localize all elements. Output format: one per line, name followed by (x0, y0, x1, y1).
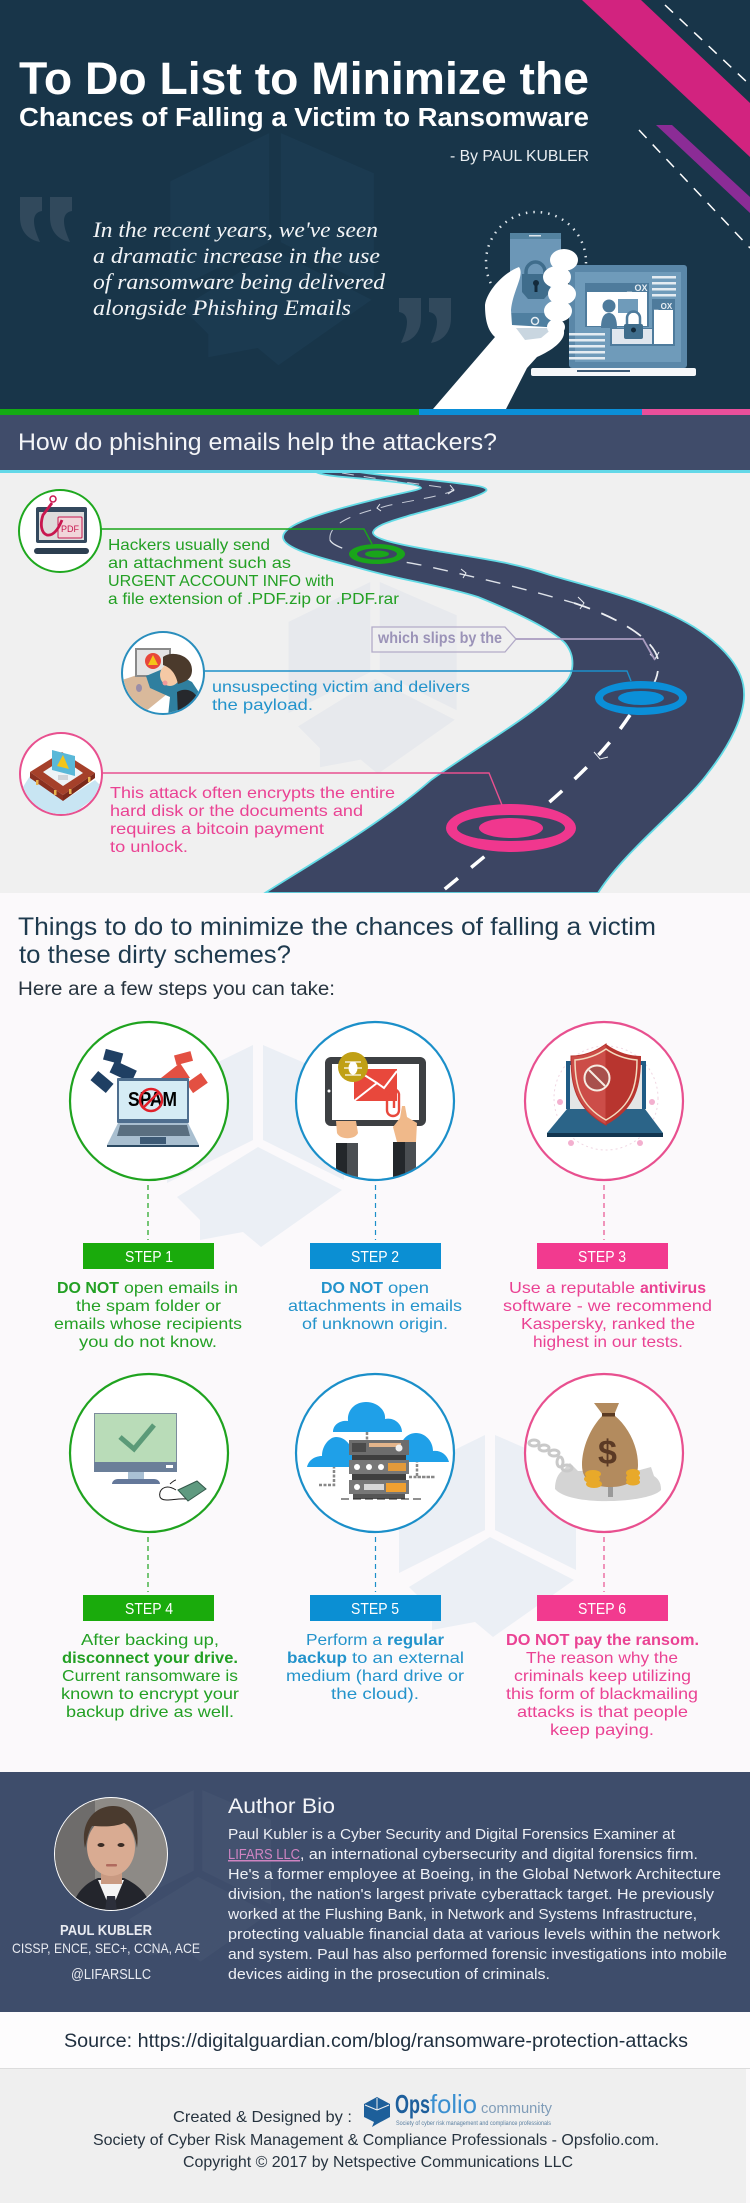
text: hackers usually send: Hackers usually send (108, 537, 270, 554)
step 3 (503, 1022, 712, 1351)
bio text: devices aiding in the prosecution of criminals. (228, 1966, 550, 1983)
author name and credentials: PAUL KUBLER (60, 1922, 152, 1939)
watermark: author hexagon (121, 1790, 271, 1962)
connector (603, 1537, 605, 1592)
bio text: He's a former employee at Boeing, in the Global Network Architecture (228, 1866, 721, 1883)
bio text: protecting valuable financial data at various levels within the network (228, 1926, 721, 1943)
icon: spam laptop (70, 1022, 228, 1180)
step text: Kaspersky, ranked the (521, 1316, 695, 1333)
step text: open (388, 1280, 429, 1297)
author name and credentials (12, 1922, 200, 1983)
byline: - By PAUL KUBLER (450, 148, 589, 165)
step text: highest in our tests. (533, 1334, 683, 1351)
step label (537, 1243, 668, 1269)
credits (93, 2132, 659, 2171)
icon: tablet attachment (296, 1022, 454, 1180)
icon: ransom money bag (525, 1374, 683, 1532)
panel: header (0, 0, 750, 409)
step label: STEP 2 (351, 1249, 399, 1266)
step label: STEP 3 (578, 1249, 626, 1266)
step text: criminals keep utilizing (514, 1668, 691, 1685)
step text: Perform a (306, 1632, 382, 1649)
text: hackers usually send (108, 537, 400, 608)
heading: things to do (18, 913, 656, 969)
connector (147, 1185, 149, 1240)
step text: you do not know. (79, 1334, 217, 1351)
text: unsuspecting victim: the payload. (212, 697, 313, 714)
connector (374, 1185, 376, 1240)
icon: opening quote (20, 197, 72, 242)
step 5 (286, 1374, 465, 1703)
step text: Current ransomware is (62, 1668, 238, 1685)
step 1 (54, 1022, 242, 1351)
step text: open emails in (124, 1280, 238, 1297)
text: this attack encrypts (110, 785, 395, 856)
color bar (0, 409, 750, 415)
watermark: header hexagon (170, 133, 374, 365)
tag: which slips by the (372, 627, 655, 660)
title: To Do List to Minimize the (19, 53, 589, 104)
author name and credentials: @LIFARSLLC (71, 1967, 151, 1983)
credits: Copyright © 2017 by Netspective Communications LLC (183, 2154, 573, 2171)
heading band: how do phishing emails help (0, 415, 750, 473)
icon: closing quote (399, 298, 451, 343)
icon: cloud and servers (296, 1374, 454, 1532)
step text: medium (hard drive or (286, 1668, 465, 1685)
step text: to an external (352, 1650, 464, 1667)
text: this attack encrypts: This attack often encrypts the entire (110, 785, 395, 802)
marker: blue ring (595, 681, 687, 715)
step 6 (506, 1374, 699, 1739)
step text: The reason why the (526, 1650, 678, 1667)
illustration: phone, laptop and hand: _ OX (653, 302, 673, 311)
step text (61, 1632, 240, 1721)
step text: After backing up, (81, 1632, 219, 1649)
heading: things to do: to these dirty schemes? (19, 941, 291, 969)
intro quote text: of ransomware being delivered (93, 269, 386, 294)
bio text: division, the nation's largest private cyberattack target. He previously (228, 1886, 715, 1903)
logo: opsfolio community: community (481, 2100, 552, 2117)
created by: Created & Designed by : (173, 2109, 352, 2126)
step text (286, 1632, 465, 1703)
bio text: , an international cybersecurity and digital forensics firm. (300, 1846, 698, 1863)
text: this attack encrypts: to unlock. (110, 839, 188, 856)
illustration: phone, laptop and hand: _ OX (626, 283, 648, 293)
step text (506, 1632, 699, 1739)
icon: ransom money bag: $ (598, 1434, 617, 1472)
panel: road section (0, 472, 750, 893)
icon: spam laptop: SPAM (128, 1089, 177, 1111)
intro quote text: In the recent years, we've seen (92, 217, 378, 242)
watermark: row two hexagon (399, 1435, 576, 1637)
step text: keep paying. (550, 1722, 654, 1739)
icon: phishing hook on laptop: PDF (61, 524, 80, 534)
pink diagonal band (582, 0, 750, 157)
step label (310, 1243, 441, 1269)
step text: disconnect your drive. (62, 1650, 238, 1667)
watermark: row one hexagon (167, 1045, 344, 1247)
step text: regular (387, 1632, 444, 1649)
bio text (227, 1826, 727, 1983)
logo: opsfolio community (364, 2089, 552, 2127)
icon: phishing hook on laptop (19, 490, 101, 572)
bio text: Paul Kubler is a Cyber Security and Digital Forensics Examiner at (228, 1826, 676, 1843)
step text (288, 1280, 462, 1333)
connector (147, 1537, 149, 1592)
step text: emails whose recipients (54, 1316, 242, 1333)
step text: the cloud). (331, 1686, 419, 1703)
text: unsuspecting victim (212, 679, 470, 714)
step label: STEP 4 (125, 1601, 173, 1618)
step text: attacks is that people (517, 1704, 688, 1721)
step text: DO NOT (321, 1280, 383, 1297)
step label (83, 1243, 214, 1269)
step text: known to encrypt your (61, 1686, 240, 1703)
illustration: phone, laptop and hand (433, 212, 696, 409)
credits: Society of Cyber Risk Management & Compliance Professionals - Opsfolio.com. (93, 2132, 659, 2149)
step 4 (61, 1374, 240, 1721)
marker: green ring (349, 544, 405, 564)
step text: backup drive as well. (66, 1704, 234, 1721)
step 2 (288, 1022, 462, 1333)
intro quote text: a dramatic increase in the use (93, 243, 380, 268)
logo: opsfolio community: Ops (395, 2089, 430, 2119)
connector (374, 1537, 376, 1592)
step text: DO NOT (57, 1280, 119, 1297)
step label (537, 1595, 668, 1621)
source line: Source: https://digitalguardian.com/blog/ransomware-protection-attacks (64, 2031, 688, 2052)
subheading: Here are a few steps you can take: (18, 979, 335, 1000)
bio heading: Author Bio (228, 1795, 335, 1818)
author name and credentials: CISSP, ENCE, SEC+, CCNA, ACE (12, 1940, 200, 1956)
heading band: how do phishing emails help: How do phishing emails help the attackers? (18, 429, 497, 456)
step text: software - we recommend (503, 1298, 712, 1315)
icon: antivirus shield (525, 1022, 683, 1180)
dashed diagonal lines (639, 5, 750, 248)
step text: DO NOT pay the ransom. (506, 1632, 699, 1649)
text: hackers usually send: an attachment such as (108, 555, 291, 572)
step text: of unknown origin. (302, 1316, 448, 1333)
panel: steps section (18, 917, 711, 1738)
step label (310, 1595, 441, 1621)
author photo (54, 1797, 168, 1911)
purple diagonal band (656, 125, 750, 213)
step text: the spam folder or (76, 1298, 222, 1315)
connector lines (101, 529, 631, 805)
title (19, 53, 589, 132)
text: hackers usually send: a file extension of .PDF.zip or .PDF.rar (108, 591, 400, 608)
watermark: road section hexagon (289, 582, 457, 774)
logo: opsfolio community: folio (430, 2089, 477, 2119)
heading: things to do: Things to do to minimize the chances of falling a victim (18, 913, 656, 941)
step text: backup (287, 1650, 347, 1667)
step text: attachments in emails (288, 1298, 462, 1315)
text: this attack encrypts: hard disk or the documents and (110, 803, 363, 820)
step label: STEP 5 (351, 1601, 399, 1618)
step text (54, 1280, 242, 1351)
text: unsuspecting victim: unsuspecting victim and delivers (212, 679, 470, 696)
step label (83, 1595, 214, 1621)
bio text: LIFARS LLC (228, 1846, 300, 1863)
panel: author bio (0, 1772, 750, 2012)
panel: footer (0, 2068, 750, 2203)
bio text: worked at the Flushing Bank, in Network and Systems Infrastructure, (227, 1906, 697, 1923)
step text (503, 1280, 712, 1351)
road (265, 472, 744, 893)
text: this attack encrypts: requires a bitcoin payment (110, 821, 325, 838)
step text: Use a reputable (509, 1280, 635, 1297)
title: Chances of Falling a Victim to Ransomware (19, 104, 589, 132)
connector (603, 1185, 605, 1240)
step text: this form of blackmailing (506, 1686, 698, 1703)
tag: which slips by the: which slips by the (377, 630, 502, 647)
icon: monitor and backup drive (70, 1374, 228, 1532)
bio text: and system. Paul has also performed forensic investigations into mobile (228, 1946, 727, 1963)
step text: antivirus (640, 1280, 706, 1297)
marker: pink ring (446, 804, 576, 852)
source line (0, 2012, 750, 2068)
step label: STEP 1 (125, 1249, 173, 1266)
text: hackers usually send: URGENT ACCOUNT INFO with (108, 573, 334, 590)
step label: STEP 6 (578, 1601, 626, 1618)
intro quote text: alongside Phishing Emails (93, 295, 351, 320)
icon: worried victim (122, 632, 204, 716)
icon: locked computer (20, 733, 105, 820)
intro quote text (92, 217, 386, 320)
logo: opsfolio community: Society of cyber risk management and compliance professionals (396, 2120, 552, 2127)
